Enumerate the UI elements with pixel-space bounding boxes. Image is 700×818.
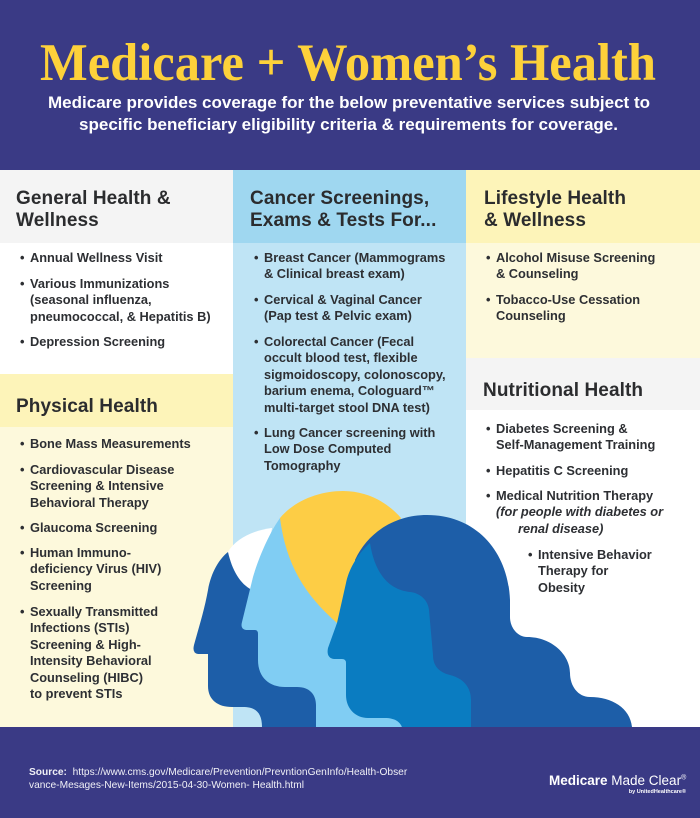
list item: medical nutrition therapy: (for people with diabetes or	[496, 504, 663, 519]
panel: physical health	[0, 374, 233, 727]
source citation: Source: https://www.cms.gov/Medicare/Prevention/PrevntionGenInfo/Health-Obser	[29, 767, 407, 778]
list item: diabetes: Self-Management Training	[496, 437, 655, 452]
panel: lifestyle health	[466, 170, 700, 358]
list item: STIs: Sexually Transmitted	[30, 604, 158, 619]
heading: general health	[0, 170, 233, 243]
header band	[0, 0, 700, 169]
list item: diabetes	[496, 421, 655, 454]
panel: cancer screenings	[233, 170, 466, 727]
heading: general health: Wellness	[16, 210, 99, 231]
list item: medical nutrition therapy: renal disease)	[518, 521, 603, 536]
footer band	[0, 727, 700, 818]
panel: general health and wellness	[0, 170, 233, 374]
list item: medical nutrition therapy	[496, 488, 663, 537]
heading: nutritional health	[466, 358, 700, 410]
list item: colorectal cancer: barium enema, Cologuard™	[264, 383, 435, 398]
list item: cervical cancer	[264, 292, 422, 325]
logo: Medicare Made Clear: by UnitedHealthcare®	[629, 789, 686, 795]
list item: STIs: to prevent STIs	[30, 686, 122, 701]
panel: nutritional health	[466, 358, 700, 727]
list item: HIV	[30, 545, 161, 594]
list item: depression screening: Depression Screening	[30, 334, 165, 349]
heading: general health: General Health &	[16, 188, 171, 209]
list item: STIs: Infections (STIs)	[30, 620, 130, 635]
heading: lifestyle health: Lifestyle Health	[484, 188, 626, 209]
subtitle: specific beneficiary eligibility criteria & requirements for coverage.	[79, 116, 618, 134]
list item: immunizations: pneumococcal, & Hepatitis B)	[30, 309, 211, 324]
list item: lung cancer: Tomography	[264, 458, 341, 473]
source citation	[29, 767, 408, 791]
list item: alcohol misuse	[496, 250, 655, 283]
list item: tobacco: Tobacco-Use Cessation	[496, 292, 640, 307]
heading: cancer screenings	[233, 170, 466, 243]
list item: cervical cancer: Cervical & Vaginal Cancer	[264, 292, 422, 307]
heading: cancer screenings: Exams & Tests For...	[250, 210, 436, 231]
list item: STIs: Counseling (HIBC)	[30, 670, 143, 685]
list item: intensive behavior therapy: Therapy for	[538, 563, 608, 578]
list item: HIV: Human Immuno-	[30, 545, 131, 560]
list item: intensive behavior therapy	[538, 547, 652, 596]
list item: glaucoma: Glaucoma Screening	[30, 520, 157, 535]
list item: colorectal cancer: multi-target stool DNA test)	[264, 400, 430, 415]
list item: annual wellness visit: Annual Wellness Visit	[30, 250, 163, 265]
list item: lung cancer	[264, 425, 435, 474]
subtitle	[48, 94, 650, 134]
list item: breast cancer: Breast Cancer (Mammograms	[264, 250, 445, 265]
heading: physical health: Physical Health	[16, 396, 158, 417]
logo: Medicare Made Clear	[549, 773, 686, 795]
list item: HIV: Screening	[30, 578, 92, 593]
list item: tobacco: Counseling	[496, 308, 566, 323]
list item: cardiovascular: Screening & Intensive	[30, 478, 164, 493]
heading: physical health	[0, 374, 233, 427]
list item: medical nutrition therapy: Medical Nutrition Therapy	[496, 488, 653, 503]
list item: breast cancer	[264, 250, 445, 283]
list item: STIs: Intensity Behavioral	[30, 653, 152, 668]
list item: intensive behavior therapy: Obesity	[538, 580, 585, 595]
heading: lifestyle health	[466, 170, 700, 243]
list item: diabetes: Diabetes Screening &	[496, 421, 628, 436]
heading: lifestyle health: & Wellness	[484, 210, 586, 231]
list item: immunizations: (seasonal influenza,	[30, 292, 152, 307]
list item: tobacco	[496, 292, 640, 325]
list item: cardiovascular: Behavioral Therapy	[30, 495, 149, 510]
list item: colorectal cancer: sigmoidoscopy, colonoscopy,	[264, 367, 446, 382]
list item: colorectal cancer: Colorectal Cancer (Fecal	[264, 334, 414, 349]
list item: intensive behavior therapy: Intensive Behavior	[538, 547, 652, 562]
list item: lung cancer: Low Dose Computed	[264, 441, 391, 456]
source citation: vance-Mesages-New-Items/2015-04-30-Women- Health.html	[29, 780, 304, 791]
list item: immunizations: Various Immunizations	[30, 276, 169, 291]
heading: nutritional health: Nutritional Health	[483, 380, 643, 401]
list item: STIs: Screening & High-	[30, 637, 141, 652]
subtitle: Medicare provides coverage for the below preventative services subject to	[48, 94, 650, 112]
list item: lung cancer: Lung Cancer screening with	[264, 425, 435, 440]
list item: STIs	[30, 604, 158, 702]
list item: hepatitis C: Hepatitis C Screening	[496, 463, 628, 478]
heading: cancer screenings: Cancer Screenings,	[250, 188, 429, 209]
list item: immunizations	[30, 276, 211, 325]
list item: cardiovascular: Cardiovascular Disease	[30, 462, 174, 477]
logo: Medicare Made Clear: Medicare Made Clear®	[549, 773, 686, 788]
list item: alcohol misuse: & Counseling	[496, 266, 578, 281]
list item: cervical cancer: (Pap test & Pelvic exam)	[264, 308, 412, 323]
list item: bone mass: Bone Mass Measurements	[30, 436, 191, 451]
list item: alcohol misuse: Alcohol Misuse Screening	[496, 250, 655, 265]
list item: HIV: deficiency Virus (HIV)	[30, 561, 161, 576]
list item: breast cancer: & Clinical breast exam)	[264, 266, 405, 281]
list item: colorectal cancer: occult blood test, flexible	[264, 350, 418, 365]
list item: cardiovascular	[30, 462, 174, 511]
list item: colorectal cancer	[264, 334, 446, 416]
